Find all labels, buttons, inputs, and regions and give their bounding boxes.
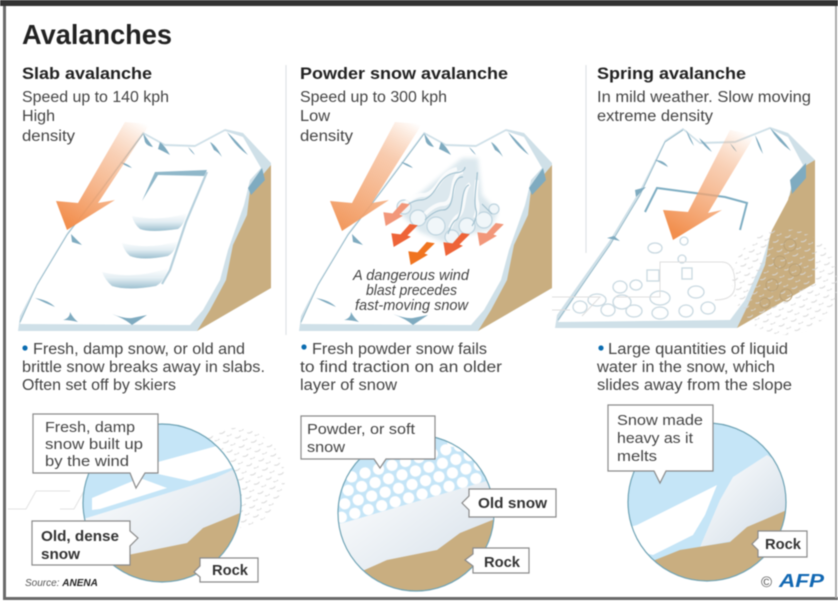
callout: rock: Rock: [212, 562, 249, 579]
heading: spring avalanche: Spring avalanche: [597, 65, 746, 83]
diagram: snow layers circle: [82, 422, 242, 584]
spring stats: [597, 89, 811, 125]
slab description: [22, 341, 265, 394]
callout: heavy snow: heavy as it: [617, 430, 694, 447]
powder description: layer of snow: [300, 377, 398, 394]
arrow: spring movement: [663, 130, 755, 240]
powder description: to find traction on an older: [300, 359, 502, 376]
spring stats: In mild weather. Slow moving: [597, 89, 811, 106]
callout: rock: Rock: [484, 554, 521, 571]
callout: old snow: [462, 489, 556, 517]
heading: slab avalanche: Slab avalanche: [22, 65, 152, 83]
arrow: powder movement: [330, 122, 422, 231]
callout: old snow: snow: [41, 546, 80, 563]
illustration: slab slope: [18, 129, 271, 331]
callout: fresh snow: snow built up: [45, 436, 143, 453]
slab stats: [22, 89, 169, 145]
callout: rock: [752, 531, 807, 557]
diagram: powder layers circle: [336, 436, 495, 592]
AFP logo: [761, 571, 825, 591]
slab description: Often set off by skiers: [22, 377, 176, 394]
title: Avalanches: [22, 19, 172, 50]
callout: old snow: Old snow: [478, 495, 547, 512]
callout: rock: [465, 548, 529, 573]
source credit: Source: ANENA: [25, 578, 98, 589]
wind blast note: fast-moving snow: [355, 298, 470, 314]
wind blast arrows: [383, 203, 504, 265]
powder stats: density: [300, 128, 353, 145]
AFP logo: AFP: [778, 571, 825, 591]
ghost artefacts: [552, 229, 838, 335]
callout: rock: [194, 558, 258, 582]
slab stats: High: [22, 108, 55, 125]
spring description: water in the snow, which: [596, 359, 775, 376]
wind blast note: blast precedes: [366, 283, 457, 299]
column dividers: [286, 65, 586, 335]
ghost artefacts: [8, 428, 285, 528]
slab description: brittle snow breaks away in slabs.: [22, 359, 265, 376]
powder description: [300, 341, 502, 394]
powder description: Fresh powder snow fails: [312, 341, 487, 358]
callout: heavy snow: melts: [617, 448, 657, 465]
callout: heavy snow: Snow made: [617, 412, 703, 429]
callout: fresh snow: [33, 414, 158, 488]
powder stats: Speed up to 300 kph: [300, 89, 447, 106]
powder stats: [300, 89, 447, 145]
callout: heavy snow: [608, 405, 713, 483]
callout: fresh snow: Fresh, damp: [45, 419, 135, 436]
panel: powder snow avalanche: [299, 65, 556, 600]
arrow: slab movement: [56, 122, 150, 230]
illustration: spring slope: [555, 127, 815, 328]
illustration: powder slope: [299, 129, 552, 331]
spring description: slides away from the slope: [597, 377, 792, 394]
callout: old snow: Old, dense: [41, 528, 119, 545]
callout: rock: Rock: [765, 536, 802, 553]
spring stats: extreme density: [597, 108, 713, 125]
spring description: [596, 341, 792, 394]
slab stats: density: [22, 128, 75, 145]
powder cloud: [397, 158, 499, 244]
callout: powder: Powder, or soft: [307, 421, 416, 438]
panel: spring avalanche: [552, 65, 838, 590]
slab stats: Speed up to 140 kph: [22, 89, 169, 106]
callout: powder: snow: [307, 439, 345, 456]
panel: slab avalanche: [8, 65, 285, 600]
callout: fresh snow: by the wind: [45, 453, 129, 470]
diagram: melting layers circle: [620, 423, 790, 590]
wind blast note: [352, 268, 470, 314]
powder stats: Low: [300, 108, 331, 125]
slab description: Fresh, damp snow, or old and: [33, 341, 245, 358]
callout: powder: [301, 416, 435, 468]
callout: old snow: [32, 521, 138, 565]
heading: powder snow avalanche: Powder snow avalanche: [300, 65, 508, 83]
spring description: Large quantities of liquid: [608, 341, 788, 358]
wind blast note: A dangerous wind: [352, 268, 470, 284]
AFP logo: ©: [761, 574, 772, 591]
